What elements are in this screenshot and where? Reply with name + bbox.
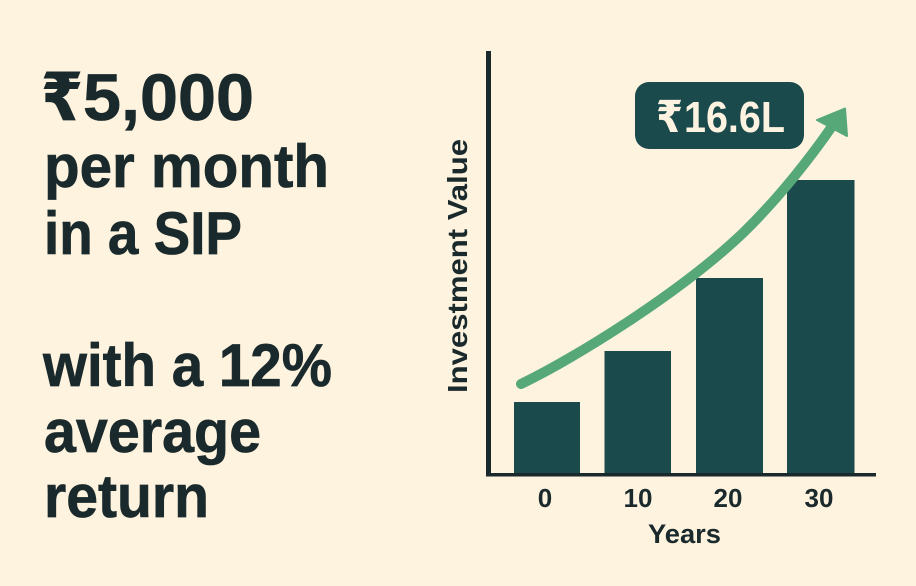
text block: monthly SIP amount (41, 60, 329, 267)
bar chart (442, 51, 876, 549)
heading line: amount: ₹ (41, 60, 83, 134)
bar: year 20 (696, 278, 763, 474)
heading line: average: average (44, 398, 261, 465)
tick label: 30: 30 (805, 483, 833, 513)
heading line: with a 12%: with a 12% (42, 332, 332, 399)
x axis tick labels (538, 483, 833, 513)
heading line: amount: 5,000 (83, 60, 254, 134)
y axis title: Investment Value (442, 139, 473, 393)
arrow head (817, 108, 847, 136)
callout value: 16.6L (684, 93, 785, 142)
heading line: per month: per month (44, 133, 329, 200)
tick label: 0: 0 (538, 483, 552, 513)
growth arrow (521, 108, 847, 384)
y axis line (486, 51, 491, 476)
tick label: 10: 10 (624, 483, 652, 513)
heading line: in a SIP: in a SIP (44, 200, 242, 267)
callout pill (635, 82, 804, 149)
callout: final value (635, 82, 804, 149)
x axis line (486, 473, 876, 476)
text block: average return (42, 332, 332, 530)
x axis title: Years (648, 519, 721, 549)
bar: year 0 (514, 402, 580, 474)
bar: year 30 (787, 180, 854, 474)
bar: year 10 (604, 351, 671, 474)
arrow shaft (521, 122, 835, 384)
callout value: ₹ (656, 93, 683, 142)
heading line: return: return (44, 463, 209, 530)
tick label: 20: 20 (714, 483, 742, 513)
